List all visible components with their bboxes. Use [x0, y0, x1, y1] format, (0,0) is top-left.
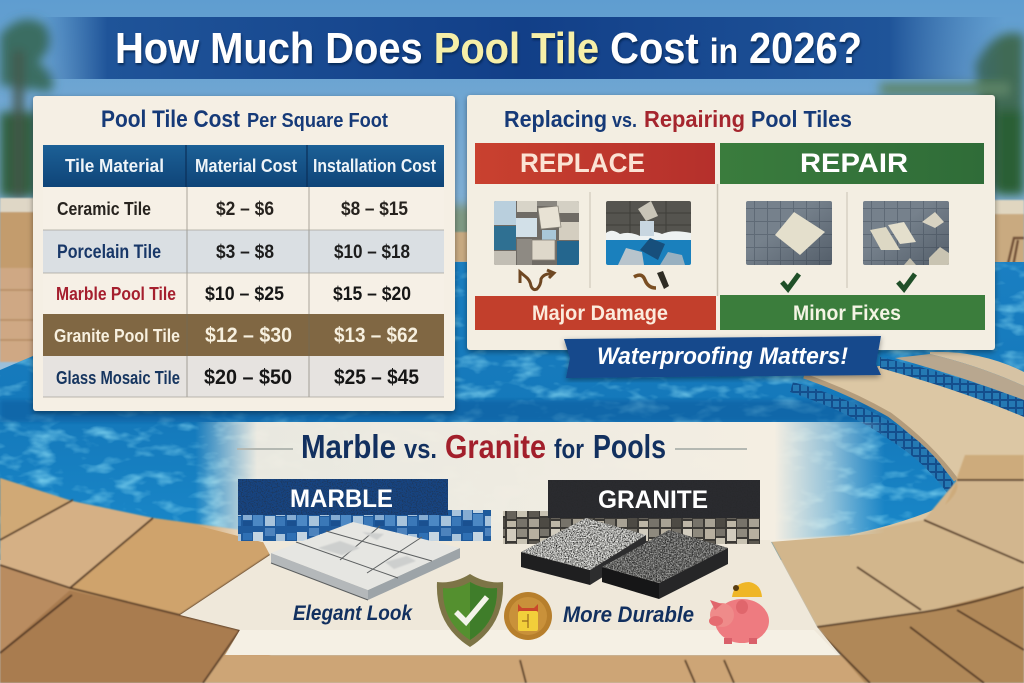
row: marble: $10 – $25: [205, 284, 284, 305]
marble label: MARBLE: [290, 485, 393, 513]
table header row: [43, 145, 444, 187]
row: porcelain: $3 – $8: [216, 242, 274, 263]
icon: check: [898, 274, 915, 289]
panel: marble vs granite: [180, 422, 885, 658]
row: ceramic: $8 – $15: [341, 199, 408, 220]
ribbon: waterproofing matters: [564, 336, 881, 378]
thumbnail: replace tiles: [494, 201, 579, 265]
panel heading: Repairing: [644, 106, 745, 132]
title banner: [40, 17, 1005, 79]
row: granite: Granite Pool Tile: [54, 326, 180, 346]
granite label: [548, 480, 760, 518]
title text: How Much Does Pool Tile Cost in 2026?: [115, 24, 862, 73]
replace header: REPLACE: [520, 148, 645, 178]
icon: coin badge: [504, 592, 552, 640]
pool mosaic band: [790, 382, 955, 494]
row: granite: $13 – $62: [334, 324, 418, 347]
heading: Granite: [445, 428, 546, 465]
heading: Pools: [593, 428, 666, 465]
major damage footer: [475, 296, 716, 330]
text: more durable: More Durable: [563, 602, 694, 627]
panel: replacing vs repairing: [467, 95, 995, 350]
panel heading: Pool Tile Cost: [101, 106, 240, 133]
row: porcelain: $10 – $18: [334, 242, 410, 263]
row: marble: Marble Pool Tile: [56, 284, 176, 304]
row: granite: [43, 314, 444, 356]
row: granite: $12 – $30: [205, 324, 292, 347]
icon: check: [782, 274, 799, 289]
marble slabs: [271, 522, 460, 600]
replace header: [475, 143, 715, 184]
marble mosaic strip: [238, 510, 491, 541]
table header row: Installation Cost: [313, 156, 436, 176]
repair header: [720, 143, 984, 184]
repair header: REPAIR: [800, 148, 908, 178]
thumbnail: broken tile repair: [863, 201, 949, 265]
panel heading: [504, 106, 852, 132]
granite label: GRANITE: [598, 486, 708, 514]
icon: damage arrows left: [520, 270, 554, 290]
heading: for: [554, 434, 584, 464]
row: marble: $15 – $20: [333, 284, 411, 305]
panel heading: Replacing: [504, 106, 607, 132]
icon: piggy bank: [709, 582, 769, 644]
granite slabs: [515, 515, 730, 599]
row: glass mosaic: [43, 356, 444, 397]
minor fixes footer: [720, 295, 985, 330]
heading: [301, 428, 666, 465]
row: porcelain: Porcelain Tile: [57, 242, 161, 263]
upper pool mosaic band: [880, 357, 1024, 417]
panel heading: Per Square Foot: [247, 110, 388, 132]
row: marble: [43, 273, 444, 314]
row: glass mosaic: Glass Mosaic Tile: [56, 368, 180, 388]
row: ceramic: [43, 187, 444, 230]
text: elegant look: Elegant Look: [293, 602, 413, 625]
icon: damage arrows right: [634, 271, 669, 289]
granite mosaic strip: [503, 511, 760, 544]
row: porcelain: [43, 230, 444, 273]
thumbnail: major damage tiles: [606, 201, 691, 265]
major damage footer: Major Damage: [532, 302, 668, 325]
minor fixes footer: Minor Fixes: [793, 302, 901, 325]
icon: shield with check: [437, 574, 503, 647]
right deck and coping: [804, 366, 1024, 600]
row: ceramic: $2 – $6: [216, 199, 274, 220]
thumbnail: single tile repair: [746, 201, 832, 265]
table header row: Material Cost: [195, 156, 297, 176]
table header row: Tile Material: [65, 156, 164, 176]
row: glass mosaic: $25 – $45: [334, 366, 419, 389]
panel: cost per square foot table: [33, 96, 455, 411]
foreground deck: [0, 455, 1024, 683]
pool water: [0, 262, 1024, 560]
panel heading: vs.: [612, 110, 637, 132]
heading: Marble: [301, 428, 396, 465]
ribbon: waterproofing matters: Waterproofing Matters!: [597, 343, 848, 370]
heading: vs.: [404, 434, 437, 464]
panel heading: [101, 106, 388, 133]
row: glass mosaic: $20 – $50: [204, 366, 292, 389]
row: ceramic: Ceramic Tile: [57, 199, 151, 219]
panel heading: Pool Tiles: [751, 106, 852, 132]
marble label: [238, 479, 448, 515]
pool wall: [0, 198, 1024, 372]
